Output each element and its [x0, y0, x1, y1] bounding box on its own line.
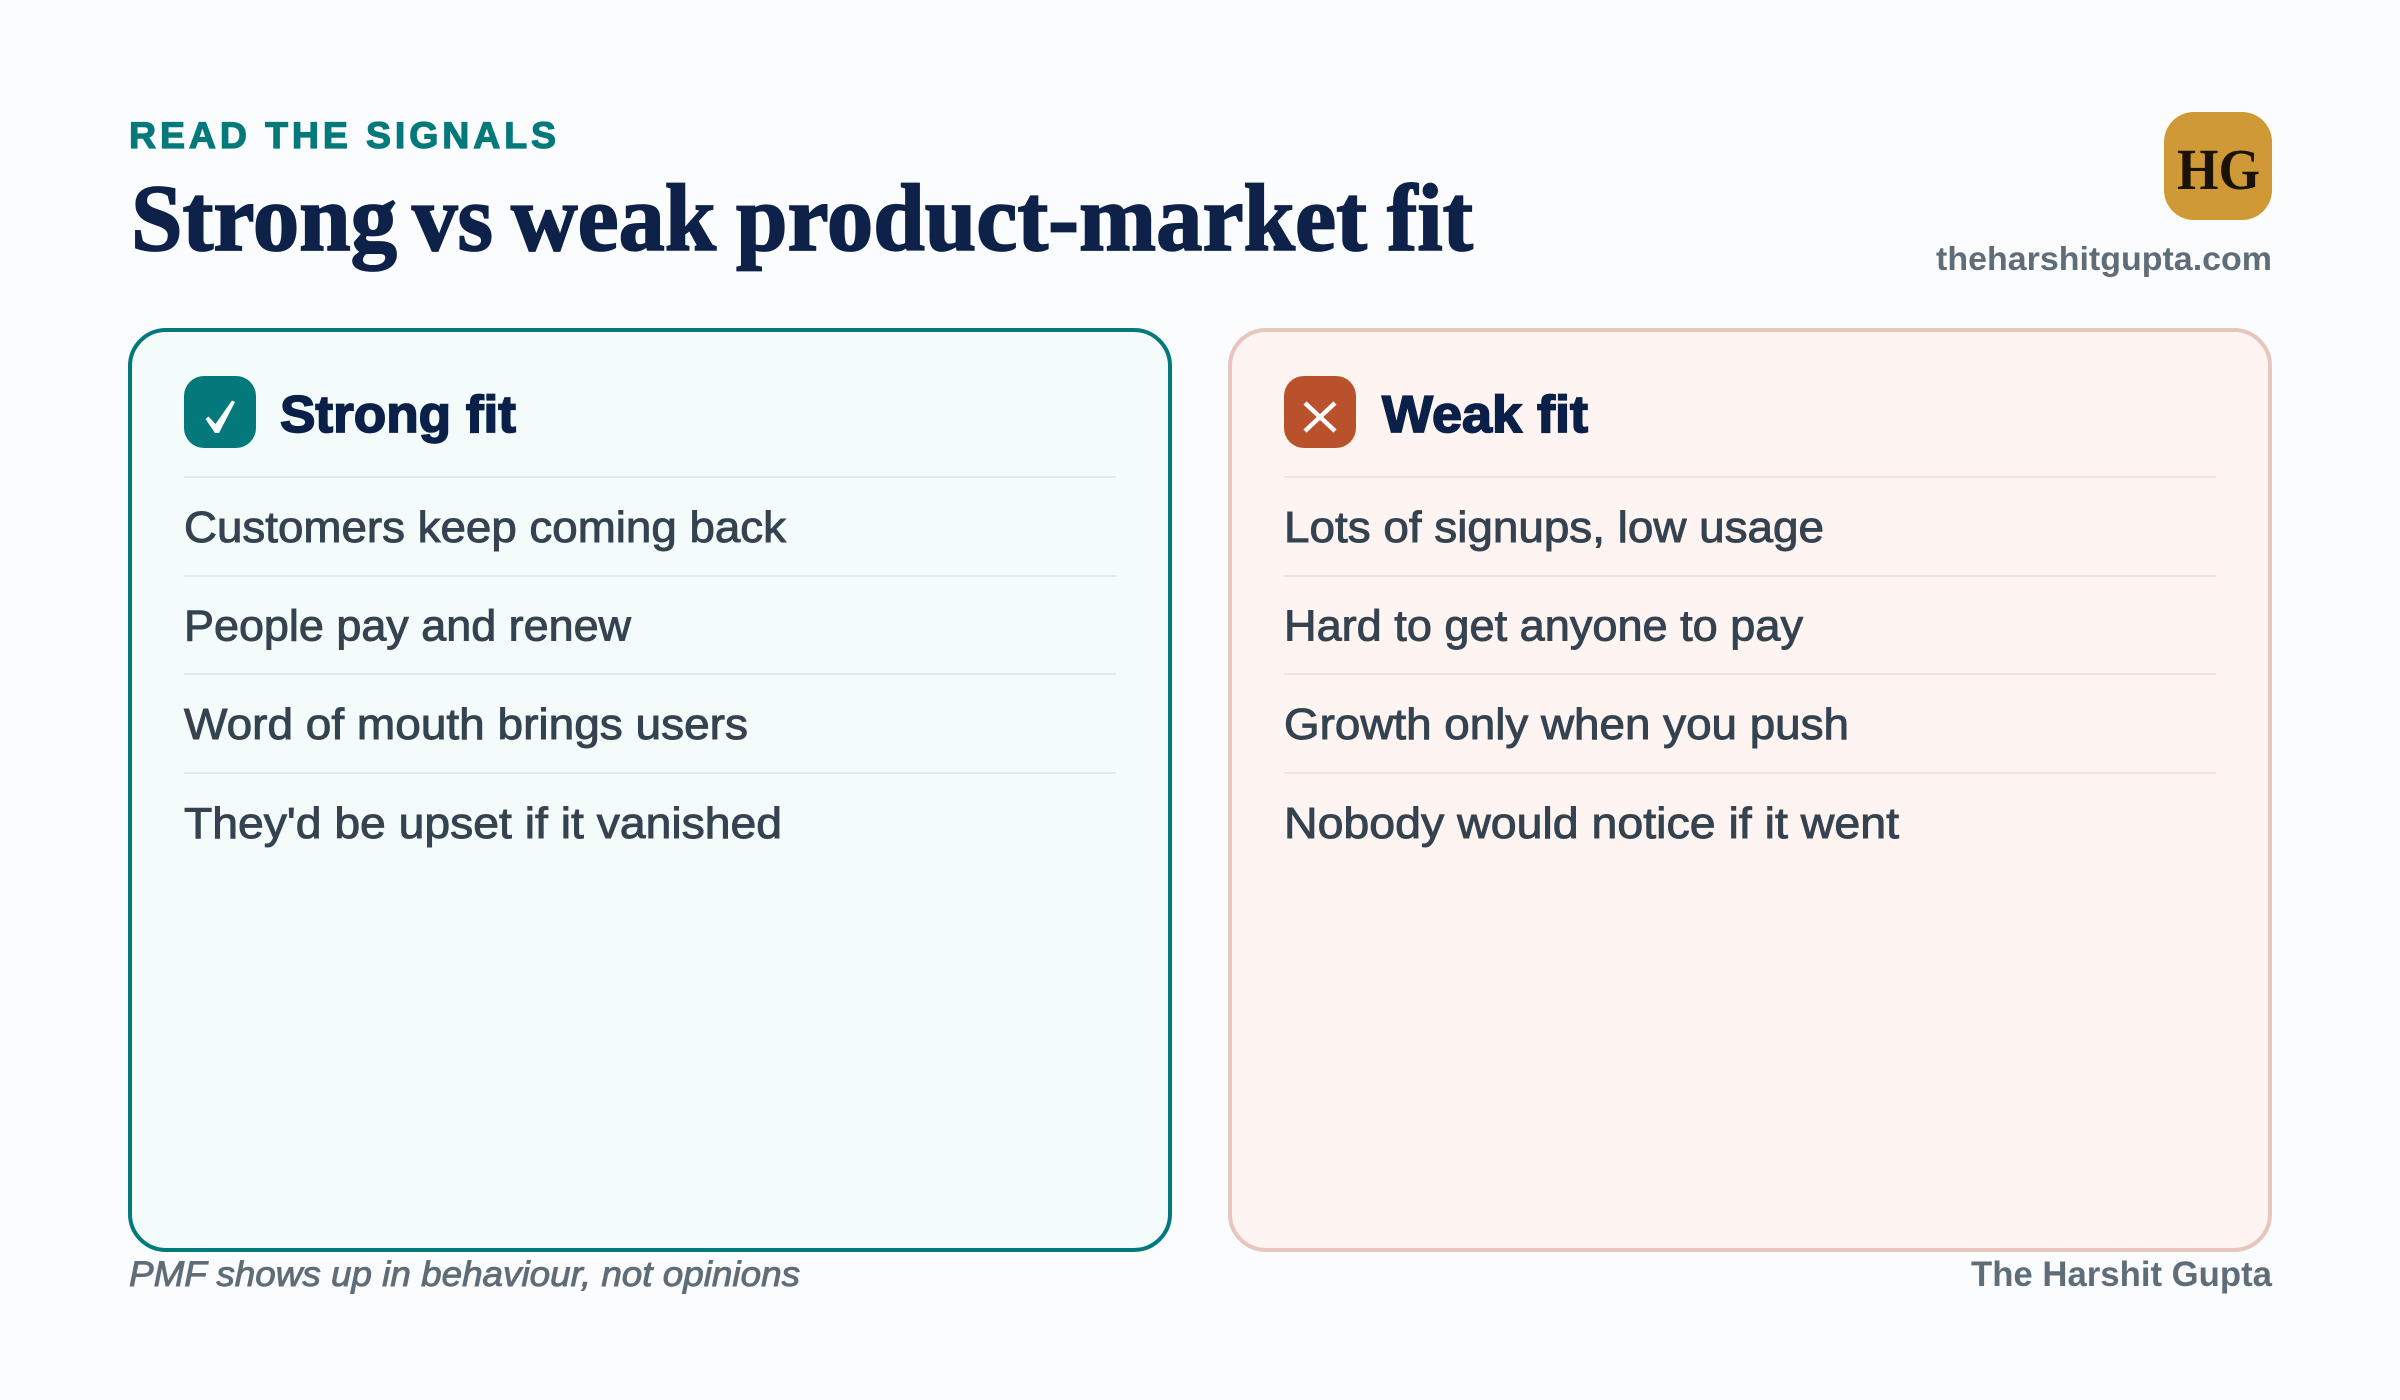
item: Hard to get anyone to pay — [1284, 602, 1803, 650]
icon: cross — [1284, 376, 1356, 448]
item: People pay and renew — [184, 602, 631, 650]
item: Customers keep coming back — [184, 503, 787, 552]
site url: theharshitgupta.com — [1936, 240, 2272, 277]
heading: weak fit: Weak fit — [1382, 386, 1588, 444]
credit: The Harshit Gupta — [1971, 1255, 2273, 1294]
icon: check mark — [184, 376, 256, 448]
item: Word of mouth brings users — [184, 700, 748, 749]
item: Lots of signups, low usage — [1284, 503, 1824, 552]
item: Growth only when you push — [1284, 700, 1849, 749]
heading: strong fit: Strong fit — [280, 386, 516, 444]
title: Strong — [131, 165, 397, 271]
eyebrow: READ THE SIGNALS — [129, 114, 556, 156]
title: product-market — [736, 165, 1367, 271]
title: vs — [412, 165, 493, 271]
logo badge: HG — [2177, 137, 2260, 202]
title: fit — [1387, 165, 1473, 271]
item: They'd be upset if it vanished — [184, 799, 782, 848]
panel: weak fit — [1230, 330, 2270, 1250]
panel: strong fit — [130, 330, 1170, 1250]
item: Nobody would notice if it went — [1284, 799, 1899, 848]
title — [131, 165, 1473, 271]
logo badge — [2164, 112, 2272, 220]
footnote: PMF shows up in behaviour, not opinions — [129, 1255, 800, 1294]
title: weak — [511, 165, 716, 271]
